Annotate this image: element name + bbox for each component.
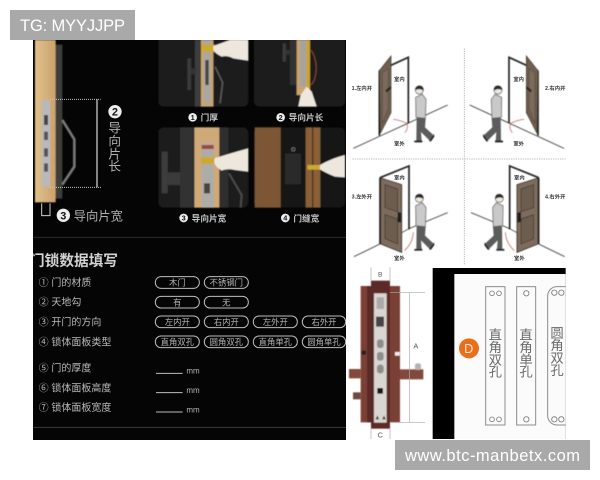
row: door thickness: ⑤ 门的厚度 [39, 361, 91, 374]
faceplate: rounded double hole: 圆 [550, 325, 564, 340]
faceplate: square double hole: 直 [489, 327, 502, 342]
diagram: left inward: 室外 [394, 139, 405, 147]
caption: door gap width: 4 [283, 214, 288, 223]
faceplate: rounded double hole [547, 286, 566, 426]
caption: door thickness [188, 113, 218, 122]
faceplate: rounded double hole: 孔 [550, 363, 564, 378]
diagram: left outward [352, 166, 448, 262]
panel: black lock measurement sheet [30, 37, 346, 440]
label: guide plate length: 导 [108, 121, 121, 135]
caption: guide plate length [276, 113, 323, 122]
diagram: right outward: 室外 [514, 254, 525, 262]
diagram: left outward: 室外 [394, 254, 405, 262]
caption: guide plate length: 导向片长 [289, 111, 324, 122]
diagram: right outward: 室内 [514, 174, 525, 182]
diagram: left outward: 室内 [394, 174, 405, 182]
row: door material: 不锈钢门 [210, 278, 243, 288]
heading: lock data form: 门锁数据填写 [30, 252, 118, 270]
panel: lock data form [30, 252, 346, 427]
row: door material: ① 门的材质 [39, 276, 91, 289]
label: guide plate width [56, 208, 122, 222]
row: faceplate width: ⑦ 锁体面板宽度 [39, 401, 111, 414]
row: opening direction: 左内开 [165, 317, 190, 327]
row: top and bottom hook [39, 296, 248, 309]
diagram: right inward: 室外 [513, 139, 525, 147]
row: opening direction: 右内开 [214, 317, 239, 327]
faceplate: square single hole: 单 [519, 352, 533, 367]
row: faceplate type [39, 335, 346, 348]
row: faceplate type: 圆角双孔 [210, 337, 244, 347]
faceplate: square double hole: 双 [489, 352, 502, 367]
faceplate: square single hole: 孔 [519, 365, 533, 380]
caption: door gap width: 门缝宽 [293, 212, 320, 223]
row: faceplate width: mm [186, 405, 200, 414]
watermark: TG handle [10, 10, 135, 40]
row: faceplate type: 圆角单孔 [307, 337, 341, 347]
panel: door opening directions [352, 48, 566, 265]
diagram: right inward: 室内 [513, 75, 524, 83]
watermark: TG handle: TG: MYYJJPP [20, 17, 125, 35]
row: opening direction: 右外开 [311, 317, 336, 327]
row: top and bottom hook: ② 天地勾 [39, 296, 81, 309]
row: faceplate type: 直角单孔 [259, 337, 293, 347]
row: top and bottom hook: 有 [173, 297, 182, 307]
watermark: website: www.btc-manbetx.com [404, 447, 580, 465]
row: opening direction: ③ 开门的方向 [39, 315, 101, 328]
caption: guide plate width: 3 [182, 214, 186, 223]
diagram: right outward [471, 166, 566, 262]
row: door thickness [39, 362, 200, 374]
caption: guide plate width: 导向片宽 [192, 212, 227, 223]
row: faceplate height [39, 382, 200, 394]
diagram: right inward: 2.右内开 [545, 84, 566, 92]
label: guide plate length [108, 105, 122, 174]
caption: guide plate width [179, 214, 226, 223]
row: door material: 木门 [169, 278, 186, 288]
panel: door measurement photos [33, 37, 346, 237]
diagram: left inward: 室内 [394, 75, 405, 83]
watermark: website [395, 440, 590, 470]
row: faceplate height: mm [186, 386, 200, 395]
label: guide plate length: 2 [112, 107, 118, 119]
label: guide plate length: 向 [108, 133, 121, 148]
diagram: left outward: 3.左外开 [352, 193, 373, 201]
faceplate: square single hole [517, 287, 536, 425]
diagram: right outward: 4.右外开 [545, 193, 566, 201]
photo 2: guide plate length [254, 37, 345, 107]
faceplate: rounded double hole: 角 [550, 338, 564, 353]
faceplate: square double hole [486, 287, 505, 425]
illustration: door with guide plate length [35, 40, 102, 216]
dimension lines: A, B and C [371, 267, 425, 440]
label: guide plate length: 片 [108, 147, 121, 161]
photo: mortise lock body [349, 281, 423, 429]
row: door material [39, 276, 248, 289]
photo 4: door gap width [254, 127, 345, 208]
photo 1: door thickness [158, 37, 248, 107]
dimension lines: A, B and C: A [413, 342, 418, 351]
panel: faceplate types [433, 268, 574, 439]
caption: door gap width [281, 214, 319, 223]
row: top and bottom hook: 无 [222, 297, 231, 307]
caption: door thickness: 1 [191, 113, 195, 122]
diagram: left inward: 1.左内开 [352, 84, 373, 92]
row: faceplate height: ⑥ 锁体面板高度 [39, 381, 111, 394]
faceplate: square single hole: 角 [519, 340, 533, 355]
row: opening direction [39, 315, 346, 328]
row: faceplate type: 直角双孔 [161, 337, 195, 347]
dimension lines: A, B and C: C [378, 431, 384, 440]
row: opening direction: 左外开 [263, 317, 288, 327]
caption: guide plate length: 2 [279, 113, 283, 122]
faceplate: square single hole: 直 [519, 327, 533, 342]
label: guide plate length: 长 [108, 160, 121, 174]
label: guide plate width: 3 [60, 210, 66, 222]
faceplate: square double hole: 孔 [489, 365, 502, 380]
diagram: right inward [470, 56, 566, 148]
row: door thickness: mm [186, 367, 200, 376]
dimension lines: A, B and C: B [378, 272, 383, 279]
row: faceplate width [38, 402, 200, 412]
diagram: left inward [352, 56, 448, 148]
caption: door thickness: 门厚 [201, 111, 218, 122]
photo 3: guide plate width [158, 127, 248, 208]
faceplate: rounded double hole: 双 [550, 351, 564, 366]
badge: D: D [464, 342, 473, 356]
label: guide plate width: 导向片宽 [74, 208, 123, 223]
faceplate: square double hole: 角 [489, 340, 502, 355]
panel: mortise lock dimensions [349, 267, 425, 440]
row: faceplate type: ④ 锁体面板类型 [39, 335, 111, 348]
badge: D [459, 338, 479, 358]
